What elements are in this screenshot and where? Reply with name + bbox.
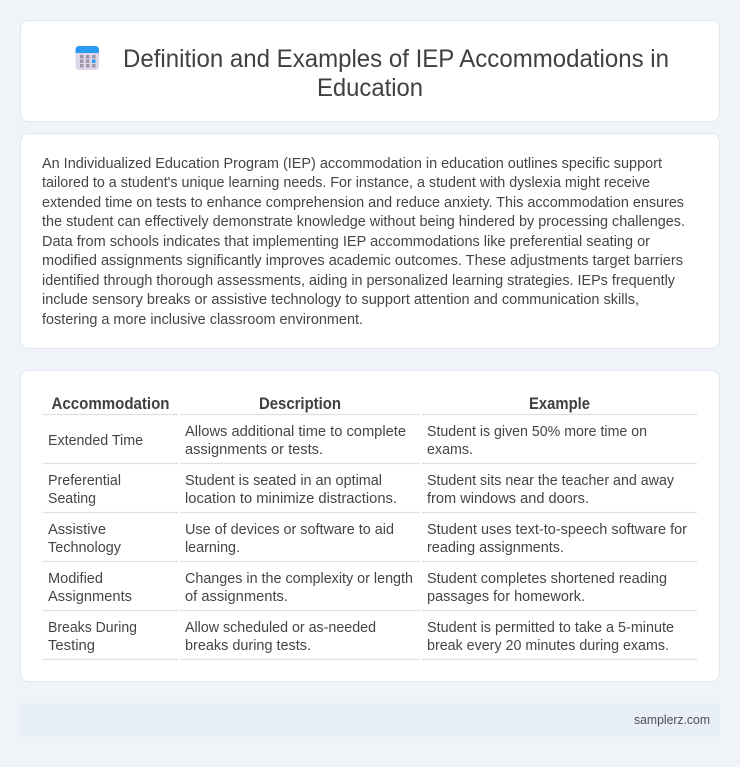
text block: definition: [42, 156, 685, 328]
table row: Modified Assignments: [43, 571, 697, 610]
table row: Extended Time: [43, 424, 697, 464]
text block: definition: the student can effectively demonstrate knowledge without being hindered by processing challenges.: [42, 214, 685, 230]
table row: Assistive Technology: Use of devices or software to aid: [185, 522, 394, 538]
table row: Modified Assignments: Assignments: [48, 589, 132, 605]
table row: Preferential Seating: location to minimize distractions.: [185, 491, 397, 507]
table row: Modified Assignments: of assignments.: [185, 589, 288, 605]
table header row: [43, 395, 697, 414]
table row: Preferential Seating: Preferential: [48, 473, 121, 489]
table row: Extended Time: Extended Time: [48, 433, 143, 449]
table row: Extended Time: assignments or tests.: [185, 442, 323, 458]
table row: Preferential Seating: Seating: [48, 491, 96, 507]
table row: Breaks During Testing: Testing: [48, 638, 95, 654]
heading: title: [123, 45, 669, 102]
table row: Modified Assignments: Modified: [48, 571, 103, 587]
footer text: samplerz.com: [634, 713, 710, 727]
table header row: Description: [259, 395, 341, 413]
heading: title: Definition and Examples of IEP Accommodations in: [123, 45, 669, 73]
text block: definition: tailored to a student's unique learning needs. For instance, a student with dyslexia might receive: [42, 175, 650, 191]
table row: Assistive Technology: Technology: [48, 540, 122, 556]
footer bar: [20, 703, 720, 737]
table row: Breaks During Testing: Student is permitted to take a 5-minute: [427, 620, 674, 636]
table row: Modified Assignments: Changes in the complexity or length: [185, 571, 413, 587]
text block: definition: identified through thorough assessments, aiding in personalized learning strategies. IEPs frequently: [42, 273, 676, 289]
text block: definition: extended time on tests to enhance comprehension and reduce anxiety. This accommodation ensures: [42, 195, 684, 211]
table row: Extended Time: exams.: [427, 442, 473, 458]
panel: title header: [20, 20, 720, 122]
table row: Preferential Seating: [43, 473, 697, 512]
table row: Assistive Technology: Student uses text-to-speech software for: [427, 522, 687, 538]
table row: Breaks During Testing: Allow scheduled or as-needed: [185, 620, 376, 636]
table row: Assistive Technology: learning.: [185, 540, 240, 556]
text block: definition: Data from schools indicates that implementing IEP accommodations like preferential seating or: [42, 234, 650, 250]
table row: Preferential Seating: from windows and doors.: [427, 491, 589, 507]
table row: Breaks During Testing: [43, 620, 697, 660]
panel: definition paragraph: [20, 134, 720, 348]
table row: Preferential Seating: Student is seated in an optimal: [185, 473, 382, 489]
table row: Assistive Technology: Assistive: [48, 522, 106, 538]
table row: Extended Time: Allows additional time to complete: [185, 424, 406, 440]
panel: accommodations table: [20, 370, 720, 682]
text block: definition: modified assignments significantly improves academic outcomes. These adjustments target barriers: [42, 253, 683, 269]
table row: Extended Time: Student is given 50% more time on: [427, 424, 647, 440]
table row: Preferential Seating: Student sits near the teacher and away: [427, 473, 675, 489]
icon: calendar: [76, 46, 99, 70]
table row: Modified Assignments: passages for homework.: [427, 589, 585, 605]
table row: Breaks During Testing: break every 20 minutes during exams.: [427, 638, 669, 654]
table row: Breaks During Testing: Breaks During: [48, 620, 137, 636]
table row: Assistive Technology: [43, 522, 697, 562]
text block: definition: An Individualized Education Program (IEP) accommodation in education outlines specific support: [42, 156, 662, 172]
table row: Modified Assignments: Student completes shortened reading: [427, 571, 667, 587]
table row: Breaks During Testing: breaks during tests.: [185, 638, 311, 654]
heading: title: Education: [317, 74, 423, 102]
table header row: Example: [529, 395, 590, 413]
table row: Assistive Technology: reading assignments.: [427, 540, 564, 556]
text block: definition: fostering a more inclusive classroom environment.: [42, 312, 363, 328]
text block: definition: include sensory breaks or assistive technology to support attention and communication skills,: [42, 292, 639, 308]
table header row: Accommodation: [52, 395, 170, 413]
